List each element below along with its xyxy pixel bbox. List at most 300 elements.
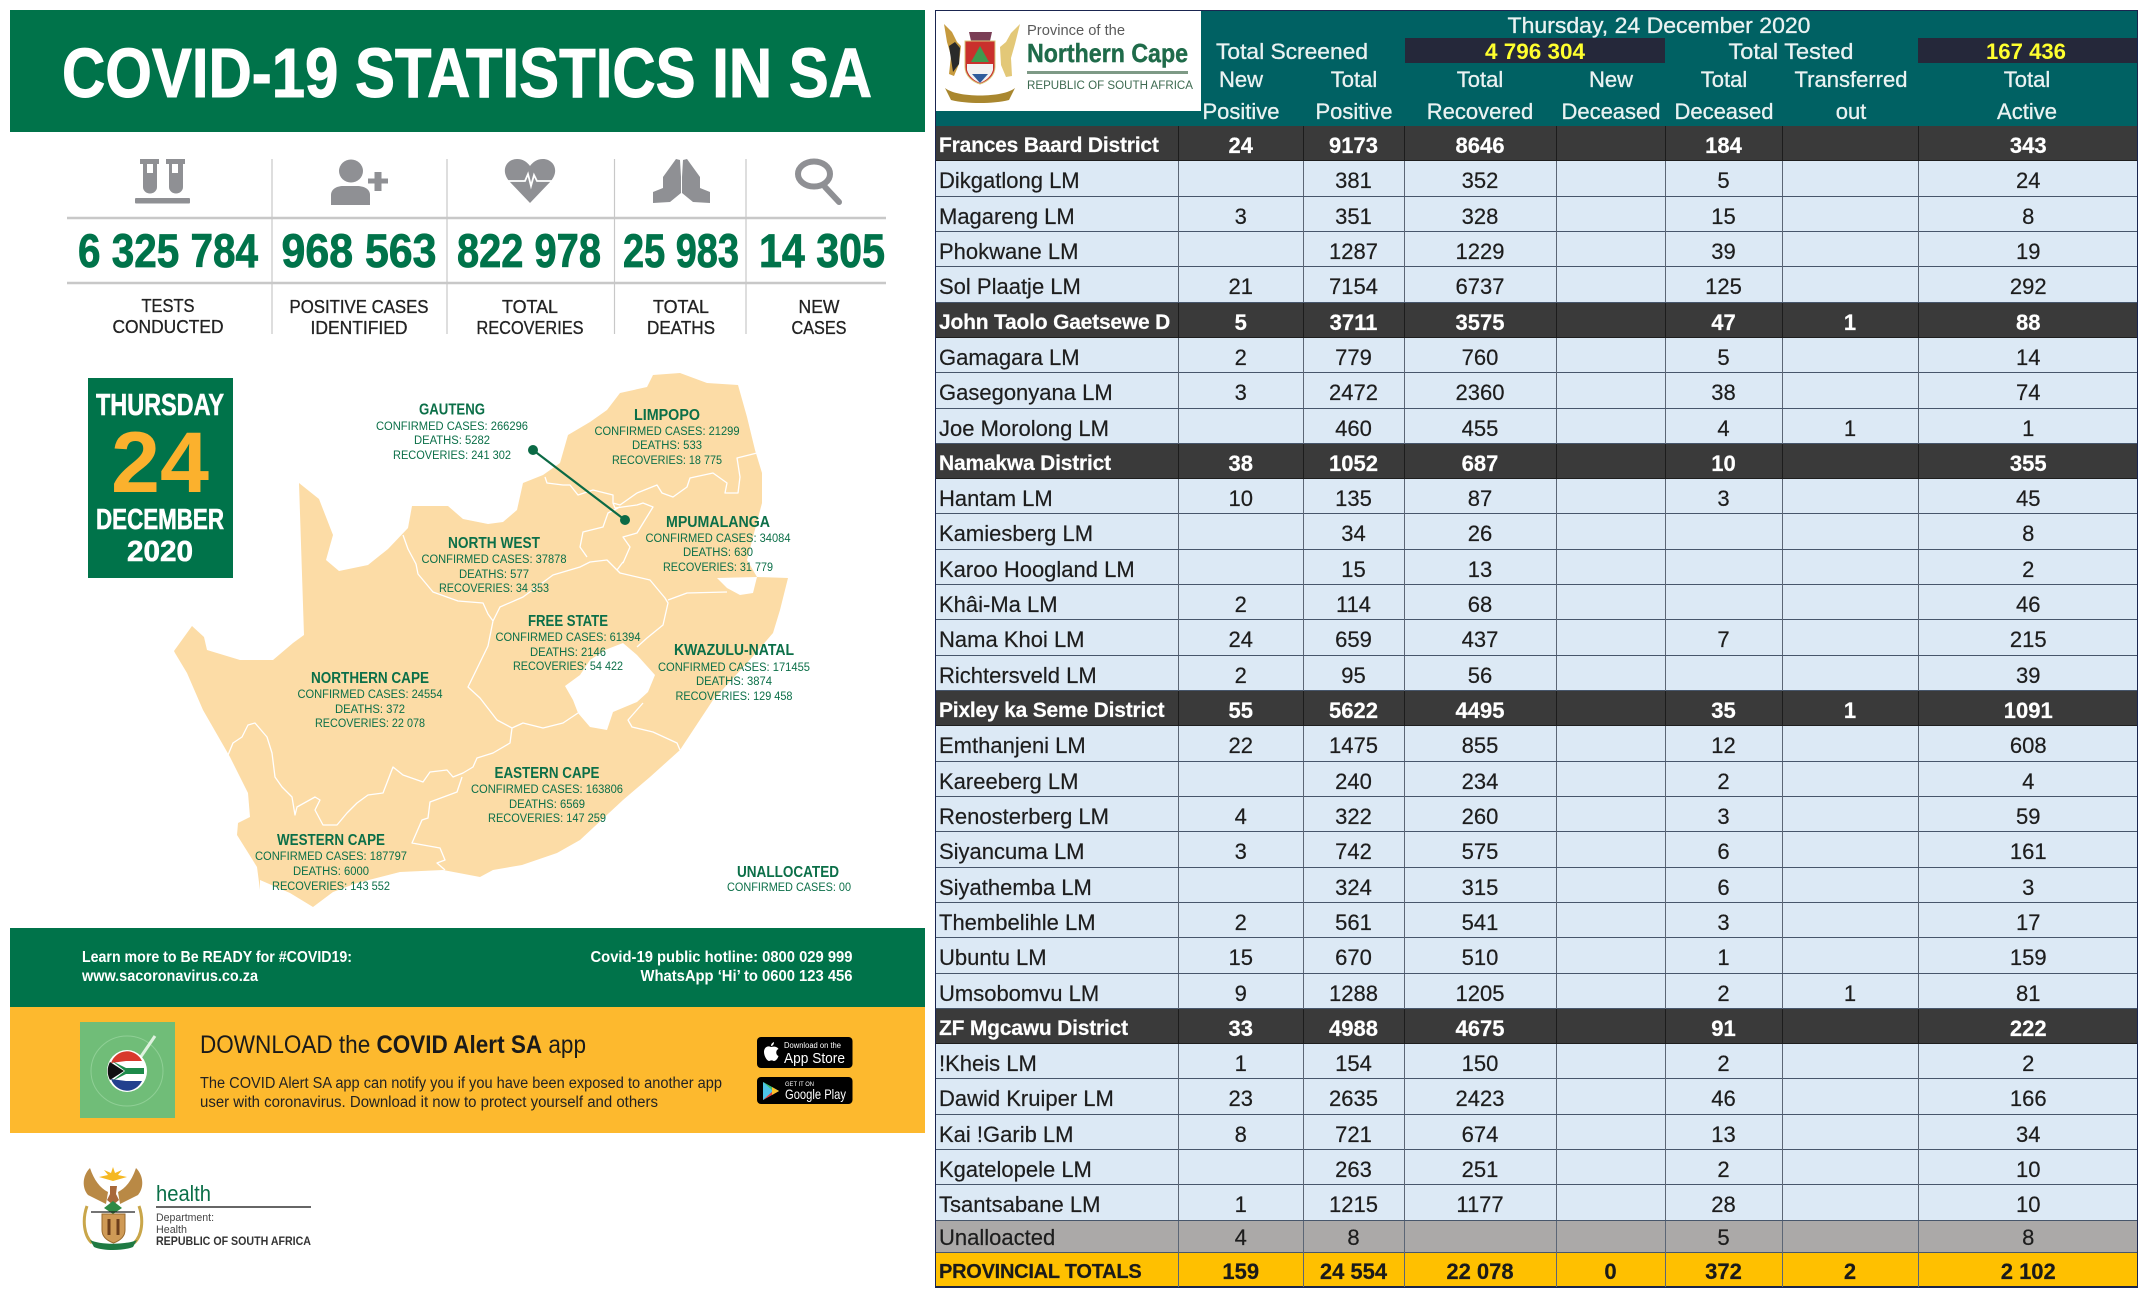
row: Renosterberg LM: 322 [1335, 804, 1372, 829]
row: Kai !Garib LM: 13 [1711, 1122, 1736, 1147]
map label: Western Cape: CONFIRMED CASES: 187797 [255, 851, 407, 863]
stat: total recoveries [457, 224, 601, 338]
map label: KwaZulu-Natal [658, 642, 810, 703]
row: Gamagara LM: 760 [1462, 345, 1498, 370]
row: Kareeberg LM: Kareeberg LM [939, 769, 1078, 794]
row: Sol Plaatje LM: 21 [1228, 274, 1253, 299]
stat: tests conducted: 6 325 784 [78, 224, 258, 277]
row: Thembelihle LM: 561 [1335, 910, 1372, 935]
row: provincial totals: 2 102 [2001, 1259, 2056, 1284]
row: provincial totals: 24 554 [1320, 1259, 1387, 1284]
map label: KwaZulu-Natal: DEATHS: 3874 [696, 676, 773, 688]
row: Kareeberg LM: 2 [1717, 769, 1730, 794]
map label: Limpopo: LIMPOPO [634, 407, 700, 424]
column headings: Active [1997, 99, 2057, 124]
health department logo [84, 1167, 311, 1250]
icon: COVID Alert SA app [80, 1022, 175, 1118]
row: Magareng LM: 328 [1462, 204, 1498, 229]
row: Sol Plaatje LM: Sol Plaatje LM [939, 274, 1081, 299]
App Store badge: App Store [784, 1050, 845, 1067]
row: !Kheis LM: 150 [1462, 1051, 1498, 1076]
row: Unallocated: Unalloacted [939, 1225, 1055, 1250]
row: Siyancuma LM: 6 [1717, 839, 1730, 864]
column headings: New [1219, 67, 1263, 92]
row: Frances Baard District: 9173 [1329, 133, 1378, 158]
row: Tsantsabane LM: 1177 [1456, 1192, 1504, 1217]
row: Gasegonyana LM: 74 [2016, 380, 2040, 405]
row: Gamagara LM [936, 338, 2138, 373]
stat: positive cases [282, 224, 436, 338]
Northern Cape logo: REPUBLIC OF SOUTH AFRICA [1027, 80, 1193, 92]
row: Siyancuma LM: 575 [1462, 839, 1498, 864]
row: Thembelihle LM: 2 [1235, 910, 1247, 935]
map label: North West: DEATHS: 577 [459, 569, 529, 581]
map label: Unallocated [727, 864, 851, 894]
app download band: The COVID Alert SA app can notify you if you have been exposed to another app [200, 1075, 722, 1092]
row: Phokwane LM: 39 [1711, 239, 1736, 264]
row: Frances Baard District: 184 [1705, 133, 1742, 158]
map label: Eastern Cape: RECOVERIES: 147 259 [488, 813, 606, 825]
row: Kgatelopele LM: 263 [1335, 1157, 1372, 1182]
stat: total deaths: DEATHS [647, 318, 715, 338]
column headings: Total [2004, 67, 2050, 92]
row: Siyancuma LM: Siyancuma LM [939, 839, 1085, 864]
row: Magareng LM: 15 [1711, 204, 1736, 229]
row: John Taolo Gaetsewe District: John Taolo Gaetsewe D [939, 311, 1170, 334]
row: Namakwa District: Namakwa District [939, 452, 1111, 475]
national statistics strip [67, 159, 886, 338]
map label: North West: NORTH WEST [448, 535, 540, 552]
row: John Taolo Gaetsewe District: 47 [1711, 310, 1736, 335]
row: Namakwa District: 1052 [1329, 451, 1378, 476]
row: Hantam LM: 135 [1335, 486, 1372, 511]
column headings: Positive [1315, 99, 1393, 124]
row: Dawid Kruiper LM: Dawid Kruiper LM [939, 1086, 1114, 1111]
App Store badge [757, 1037, 852, 1068]
map label: Mpumalanga: CONFIRMED CASES: 34084 [646, 533, 791, 545]
row: ZF Mgcawu District: 91 [1711, 1016, 1736, 1041]
row: Umsobomvu LM: 1 [1844, 980, 1856, 1006]
row: Umsobomvu LM: Umsobomvu LM [939, 980, 1099, 1006]
row: Joe Morolong LM: 4 [1717, 416, 1730, 440]
row: Dawid Kruiper LM: 46 [1711, 1086, 1736, 1111]
row: Karoo Hoogland LM: 13 [1468, 557, 1492, 582]
map label: KwaZulu-Natal: CONFIRMED CASES: 171455 [658, 662, 810, 674]
row: Gamagara LM: Gamagara LM [939, 345, 1080, 370]
row: Ubuntu LM: 1 [1717, 945, 1730, 970]
column headings: Deceased [1561, 99, 1661, 124]
icon: praying hands [653, 159, 710, 203]
row: Phokwane LM: 1229 [1456, 239, 1504, 264]
health department logo: Department: [156, 1212, 214, 1224]
row: Nama Khoi LM: 215 [2010, 627, 2047, 652]
map label: Unallocated: UNALLOCATED [737, 864, 839, 881]
row: Renosterberg LM [936, 797, 2138, 832]
row: Pixley ka Seme District [936, 691, 2138, 726]
row: Pixley ka Seme District: 1 [1844, 698, 1856, 723]
row: Dikgatlong LM: 381 [1335, 168, 1372, 193]
stat: total deaths: TOTAL [653, 297, 709, 317]
stat: positive cases: POSITIVE CASES [290, 297, 428, 317]
stat: total recoveries: RECOVERIES [476, 318, 584, 338]
map label: Free State: FREE STATE [528, 613, 608, 630]
map label: Western Cape: DEATHS: 6000 [293, 866, 369, 878]
map label: KwaZulu-Natal: RECOVERIES: 129 458 [676, 691, 792, 703]
row: Tsantsabane LM [936, 1185, 2138, 1221]
map label: Free State: CONFIRMED CASES: 61394 [496, 632, 641, 644]
total screened [1216, 38, 1665, 64]
map of South Africa [174, 373, 788, 907]
row: Frances Baard District: Frances Baard District [939, 134, 1159, 157]
row: Kareeberg LM: 4 [2022, 769, 2034, 794]
app download band: user with coronavirus. Download it now to protect yourself and others [200, 1094, 658, 1111]
row: !Kheis LM [936, 1044, 2138, 1079]
stat: total recoveries: TOTAL [502, 297, 558, 317]
row: Gasegonyana LM: 2360 [1456, 380, 1504, 405]
map label: North West [422, 535, 566, 595]
row: Gasegonyana LM: 38 [1711, 380, 1736, 405]
report date: Thursday, 24 December 2020 [1508, 13, 1810, 38]
row: Nama Khoi LM: 24 [1228, 627, 1253, 652]
stat: positive cases: IDENTIFIED [310, 318, 408, 338]
row: Sol Plaatje LM: 125 [1705, 274, 1742, 299]
row: Joe Morolong LM: Joe Morolong LM [939, 416, 1109, 440]
row: Thembelihle LM: 541 [1462, 910, 1498, 935]
row: Renosterberg LM: 4 [1235, 804, 1247, 829]
Northern Cape logo: Northern Cape [1027, 38, 1188, 68]
row: provincial totals: 159 [1222, 1259, 1259, 1284]
row: Nama Khoi LM: Nama Khoi LM [939, 627, 1085, 652]
map label: Gauteng: RECOVERIES: 241 302 [393, 450, 511, 462]
row: Richtersveld LM: 2 [1235, 663, 1247, 688]
row: John Taolo Gaetsewe District: 88 [2016, 310, 2040, 335]
row: Emthanjeni LM: Emthanjeni LM [939, 733, 1086, 758]
column headings: Transferred [1795, 67, 1907, 92]
row: Nama Khoi LM: 7 [1717, 627, 1730, 652]
map label: Gauteng [376, 402, 528, 462]
row: Gasegonyana LM [936, 373, 2138, 408]
row: Renosterberg LM: 260 [1462, 804, 1498, 829]
row: Ubuntu LM: 510 [1462, 945, 1498, 970]
green information band: Learn more to Be READY for #COVID19: [82, 949, 352, 966]
row: Dikgatlong LM: 352 [1462, 168, 1498, 193]
row: ZF Mgcawu District: 4675 [1456, 1016, 1504, 1041]
row: Siyathemba LM: 315 [1462, 875, 1498, 900]
row: Dikgatlong LM: 24 [2016, 168, 2040, 193]
row: Kai !Garib LM: 34 [2016, 1122, 2040, 1147]
row: !Kheis LM: !Kheis LM [939, 1051, 1037, 1076]
row: Siyancuma LM: 161 [2010, 839, 2047, 864]
row: provincial totals: PROVINCIAL TOTALS [939, 1261, 1141, 1283]
row: Siyathemba LM: 6 [1717, 875, 1730, 900]
row: Ubuntu LM [936, 938, 2138, 974]
row: John Taolo Gaetsewe District: 5 [1235, 310, 1247, 335]
map label: Western Cape: WESTERN CAPE [277, 832, 385, 849]
map label: Mpumalanga: DEATHS: 630 [683, 547, 753, 559]
map label: North West: CONFIRMED CASES: 37878 [422, 554, 566, 566]
row: Umsobomvu LM: 9 [1235, 980, 1247, 1006]
row: Namakwa District: 38 [1228, 451, 1253, 476]
row: Frances Baard District: 24 [1228, 133, 1253, 158]
row: Khâi-Ma LM: Khâi-Ma LM [939, 592, 1058, 617]
row: Khâi-Ma LM: 68 [1468, 592, 1492, 617]
row: Gasegonyana LM: Gasegonyana LM [939, 380, 1113, 405]
row: Phokwane LM: 1287 [1329, 239, 1378, 264]
row: Tsantsabane LM: 10 [2016, 1192, 2040, 1217]
column headings: Recovered [1427, 99, 1533, 124]
date box: THURSDAY [96, 387, 224, 422]
column headings: Deceased [1674, 99, 1774, 124]
row: Ubuntu LM: Ubuntu LM [939, 945, 1047, 970]
date box: DECEMBER [96, 504, 224, 536]
row: Hantam LM: 87 [1468, 486, 1492, 511]
row: !Kheis LM: 2 [1717, 1051, 1730, 1076]
row: Khâi-Ma LM: 2 [1235, 592, 1247, 617]
map label: Northern Cape: RECOVERIES: 22 078 [315, 718, 425, 730]
row: Kai !Garib LM: 721 [1335, 1122, 1372, 1147]
row: Thembelihle LM: Thembelihle LM [939, 910, 1096, 935]
row: Dikgatlong LM [936, 161, 2138, 197]
row: Thembelihle LM: 17 [2016, 910, 2040, 935]
row: Magareng LM: 351 [1335, 204, 1372, 229]
row: Dawid Kruiper LM: 166 [2010, 1086, 2047, 1111]
row: Emthanjeni LM [936, 726, 2138, 762]
row: Dawid Kruiper LM: 2635 [1329, 1086, 1378, 1111]
column headings: Total [1331, 67, 1377, 92]
map label: Gauteng: GAUTENG [419, 402, 485, 419]
row: Dawid Kruiper LM [936, 1079, 2138, 1115]
row: Sol Plaatje LM: 6737 [1456, 274, 1504, 299]
row: Tsantsabane LM: 28 [1711, 1192, 1736, 1217]
row: Pixley ka Seme District: 35 [1711, 698, 1736, 723]
stat: total deaths: 25 983 [623, 224, 739, 277]
row: Nama Khoi LM [936, 620, 2138, 656]
row: John Taolo Gaetsewe District: 3575 [1456, 310, 1504, 335]
row: Gamagara LM: 779 [1335, 345, 1372, 370]
row: Umsobomvu LM: 81 [2016, 980, 2040, 1006]
row: Joe Morolong LM: 1 [2022, 416, 2034, 440]
row: Renosterberg LM: 59 [2016, 804, 2040, 829]
map label: Limpopo: CONFIRMED CASES: 21299 [594, 426, 740, 438]
row: Thembelihle LM: 3 [1717, 910, 1730, 935]
health department logo: REPUBLIC OF SOUTH AFRICA [156, 1236, 311, 1248]
row: Kgatelopele LM: 251 [1462, 1157, 1498, 1182]
row: Kareeberg LM: 240 [1335, 769, 1372, 794]
row: Joe Morolong LM: 455 [1462, 416, 1498, 440]
title banner [10, 10, 925, 132]
row: Renosterberg LM: 3 [1717, 804, 1730, 829]
map label: Mpumalanga: MPUMALANGA [666, 514, 770, 531]
row: Emthanjeni LM: 22 [1228, 733, 1253, 758]
row: Ubuntu LM: 15 [1228, 945, 1253, 970]
row: Emthanjeni LM: 1475 [1329, 733, 1378, 758]
row: provincial totals: 0 [1604, 1259, 1617, 1284]
row: Richtersveld LM [936, 656, 2138, 691]
icon: coat of arms [84, 1167, 142, 1250]
Gauteng pointer line [528, 445, 630, 525]
row: Unallocated [936, 1221, 2138, 1253]
map label: Northern Cape: NORTHERN CAPE [311, 670, 429, 687]
row: Umsobomvu LM: 1205 [1456, 980, 1504, 1006]
map label: Northern Cape [298, 670, 443, 730]
row: Karoo Hoogland LM [936, 550, 2138, 585]
row: Nama Khoi LM: 659 [1335, 627, 1372, 652]
row: Frances Baard District [936, 126, 2138, 161]
row: Siyathemba LM: 324 [1335, 875, 1372, 900]
app download band [10, 1007, 925, 1133]
row: Kamiesberg LM: 34 [1341, 521, 1366, 546]
Northern Cape logo: Province of the [1027, 22, 1125, 39]
row: provincial totals [936, 1253, 2138, 1288]
row: Thembelihle LM [936, 903, 2138, 938]
row: Joe Morolong LM: 460 [1335, 416, 1372, 440]
row: Kgatelopele LM: Kgatelopele LM [939, 1157, 1092, 1182]
row: Siyancuma LM: 3 [1235, 839, 1247, 864]
row: Kgatelopele LM: 2 [1717, 1157, 1730, 1182]
row: Richtersveld LM: Richtersveld LM [939, 663, 1097, 688]
map label: Free State [496, 613, 641, 673]
stat: new cases: CASES [792, 318, 846, 338]
row: Phokwane LM: Phokwane LM [939, 239, 1078, 264]
row: John Taolo Gaetsewe District [936, 303, 2138, 338]
row: Kgatelopele LM: 10 [2016, 1157, 2040, 1182]
row: Richtersveld LM: 56 [1468, 663, 1492, 688]
district data table [936, 126, 2137, 1287]
Google Play badge [757, 1077, 852, 1104]
row: Siyathemba LM: 3 [2022, 875, 2034, 900]
row: provincial totals: 2 [1844, 1259, 1856, 1284]
date box: 24 [111, 415, 209, 511]
row: !Kheis LM: 1 [1235, 1051, 1247, 1076]
row: Namakwa District: 10 [1711, 451, 1736, 476]
total tested: 167 436 [1986, 39, 2066, 64]
row: Ubuntu LM: 670 [1335, 945, 1372, 970]
row: Magareng LM: 8 [2022, 204, 2034, 229]
health department logo: Health [156, 1224, 187, 1236]
row: Phokwane LM: 19 [2016, 239, 2040, 264]
icon: test tubes [135, 159, 190, 204]
row: Pixley ka Seme District: 55 [1228, 698, 1253, 723]
green information band [10, 928, 925, 1007]
row: Kgatelopele LM [936, 1150, 2138, 1185]
row: Siyathemba LM: Siyathemba LM [939, 875, 1092, 900]
row: Pixley ka Seme District: Pixley ka Seme District [939, 699, 1164, 722]
row: Umsobomvu LM: 2 [1717, 980, 1730, 1006]
row: Siyancuma LM: 742 [1335, 839, 1372, 864]
stat: new cases: 14 305 [759, 224, 885, 277]
row: Kamiesberg LM: Kamiesberg LM [939, 521, 1093, 546]
row: !Kheis LM: 154 [1335, 1051, 1372, 1076]
row: Dawid Kruiper LM: 23 [1228, 1086, 1253, 1111]
row: Pixley ka Seme District: 1091 [2004, 698, 2053, 723]
map label: Mpumalanga [646, 514, 791, 574]
row: Hantam LM: 3 [1717, 486, 1730, 511]
column headings [1202, 67, 2057, 124]
row: Magareng LM [936, 197, 2138, 232]
row: Namakwa District: 687 [1462, 451, 1498, 476]
row: Unallocated: 8 [2022, 1225, 2034, 1250]
row: Unallocated: 5 [1717, 1225, 1730, 1250]
icon: person plus [331, 160, 388, 205]
row: Khâi-Ma LM [936, 585, 2138, 620]
icon: Northern Cape crest [944, 24, 1020, 103]
row: Kamiesberg LM [936, 514, 2138, 550]
row: Hantam LM: Hantam LM [939, 486, 1053, 511]
row: Karoo Hoogland LM: 2 [2022, 557, 2034, 582]
row: Gamagara LM: 5 [1717, 345, 1730, 370]
row: Kai !Garib LM [936, 1115, 2138, 1150]
map label: Northern Cape: CONFIRMED CASES: 24554 [298, 689, 443, 701]
map label: Northern Cape: DEATHS: 372 [335, 704, 405, 716]
stat: positive cases: 968 563 [282, 224, 436, 277]
map label: Free State: DEATHS: 2146 [530, 647, 606, 659]
row: Karoo Hoogland LM: Karoo Hoogland LM [939, 557, 1135, 582]
row: Richtersveld LM: 39 [2016, 663, 2040, 688]
map label: North West: RECOVERIES: 34 353 [439, 583, 549, 595]
column headings: Total [1701, 67, 1747, 92]
row: Pixley ka Seme District: 4495 [1456, 698, 1504, 723]
map label: KwaZulu-Natal: KWAZULU-NATAL [674, 642, 794, 659]
stat: total recoveries: 822 978 [457, 224, 601, 277]
row: ZF Mgcawu District: 4988 [1329, 1016, 1378, 1041]
row: Kamiesberg LM: 8 [2022, 521, 2034, 546]
row: Ubuntu LM: 159 [2010, 945, 2047, 970]
row: Dikgatlong LM: 5 [1717, 168, 1730, 193]
App Store badge: Download on the [784, 1041, 842, 1050]
row: Namakwa District: 355 [2010, 451, 2047, 476]
green information band: WhatsApp ‘Hi’ to 0600 123 456 [640, 968, 853, 985]
stat: new cases [759, 224, 885, 338]
row: Kai !Garib LM: Kai !Garib LM [939, 1122, 1074, 1147]
row: Sol Plaatje LM: 292 [2010, 274, 2047, 299]
map label: Mpumalanga: RECOVERIES: 31 779 [663, 562, 773, 574]
row: Joe Morolong LM [936, 408, 2138, 444]
app download band: DOWNLOAD the COVID Alert SA app [200, 1031, 586, 1059]
row: Magareng LM: Magareng LM [939, 204, 1075, 229]
map label: Western Cape: RECOVERIES: 143 552 [272, 881, 390, 893]
row: Karoo Hoogland LM: 15 [1341, 557, 1366, 582]
map label: Limpopo [594, 407, 740, 467]
row: Joe Morolong LM: 1 [1844, 416, 1856, 440]
row: Gasegonyana LM: 2472 [1329, 380, 1378, 405]
row: Kamiesberg LM: 26 [1468, 521, 1492, 546]
row: Tsantsabane LM: 1215 [1329, 1192, 1378, 1217]
column headings: Total [1457, 67, 1503, 92]
row: Frances Baard District: 8646 [1456, 133, 1504, 158]
stat: tests conducted: TESTS [142, 296, 194, 316]
Northern Cape logo [936, 11, 1201, 111]
Google Play badge: GET IT ON [785, 1081, 814, 1088]
stat: new cases: NEW [798, 297, 840, 317]
row: Kareeberg LM [936, 762, 2138, 797]
row: Dikgatlong LM: Dikgatlong LM [939, 168, 1080, 193]
row: Magareng LM: 3 [1235, 204, 1247, 229]
row: Tsantsabane LM: Tsantsabane LM [939, 1192, 1100, 1217]
map label: Free State: RECOVERIES: 54 422 [513, 661, 623, 673]
map label: Eastern Cape [471, 765, 623, 825]
row: Frances Baard District: 343 [2010, 133, 2047, 158]
total tested [1728, 38, 2138, 64]
map label: Western Cape [255, 832, 407, 893]
row: Gamagara LM: 14 [2016, 345, 2040, 370]
column headings: Positive [1202, 99, 1280, 124]
row: Hantam LM [936, 479, 2138, 514]
green information band: www.sacoronavirus.co.za [81, 968, 258, 985]
total screened: Total Screened [1216, 39, 1368, 64]
row: Umsobomvu LM [936, 974, 2138, 1009]
date box [88, 378, 233, 578]
column headings: out [1836, 99, 1866, 124]
